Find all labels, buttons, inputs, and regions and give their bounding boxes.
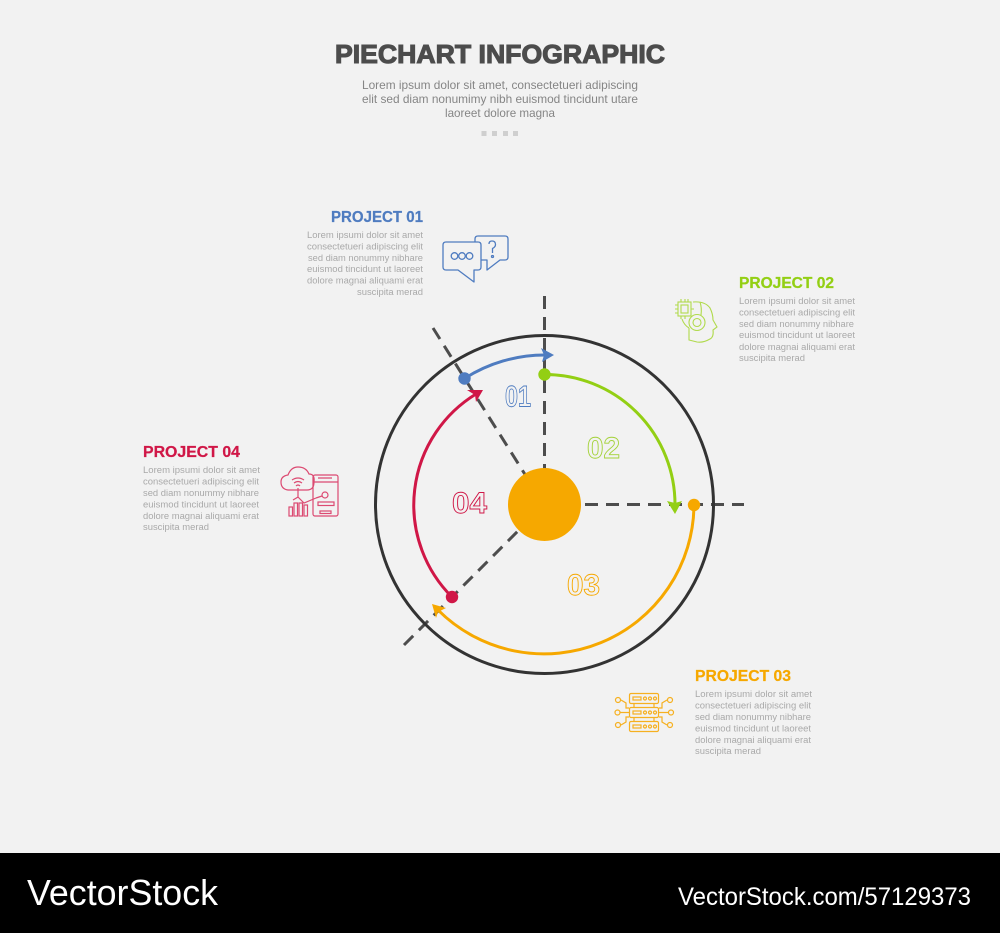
text block project 04 [143, 465, 260, 533]
text block project 03 [695, 689, 812, 757]
footer bar [0, 853, 1000, 933]
dashed divider lines [404, 296, 744, 645]
text block project 03: euismod tincidunt ut laoreet [695, 724, 811, 734]
number 02: 02 [587, 432, 620, 465]
heading project 04: PROJECT 04 [143, 444, 240, 461]
footer url: VectorStock.com/57129373 [678, 883, 971, 911]
text block project 01 [307, 230, 423, 298]
number 01: 01 [505, 380, 531, 414]
text block project 01: Lorem ipsumi dolor sit amet [307, 230, 423, 241]
footer logo: VectorStock [27, 872, 219, 913]
text block project 02: consectetueri adipiscing elit [739, 308, 855, 318]
number 03: 03 [567, 569, 600, 602]
text block project 03: Lorem ipsumi dolor sit amet [695, 689, 812, 700]
text block project 01: sed diam nonummy nibhare [308, 253, 423, 264]
centre circle [508, 468, 581, 541]
subtitle text block [362, 78, 638, 120]
text block project 02: suscipita merad [739, 353, 805, 364]
text block project 03: dolore magnai aliquami erat [695, 735, 811, 746]
text block project 02: dolore magnai aliquami erat [739, 342, 855, 353]
text block project 03: consectetueri adipiscing elit [695, 700, 811, 712]
heading project 03: PROJECT 03 [695, 668, 791, 685]
title: PIECHART INFOGRAPHIC [335, 39, 665, 69]
text block project 02: Lorem ipsumi dolor sit amet [739, 296, 855, 307]
text block project 02 [739, 296, 855, 364]
text block project 04: suscipita merad [143, 522, 209, 533]
panel: project 04 [143, 444, 338, 533]
arc 01 blue arrow [458, 348, 554, 385]
text block project 03: sed diam nonummy nibhare [695, 712, 811, 723]
panel: project 02 [675, 275, 855, 364]
text block project 04: euismod tincidunt ut laoreet [143, 500, 259, 510]
number 04: 04 [452, 487, 487, 520]
text block project 02: euismod tincidunt ut laoreet [739, 330, 855, 341]
title dots [482, 131, 518, 136]
subtitle text block: laoreet dolore magna [445, 106, 555, 120]
panel: project 03 [615, 668, 812, 757]
panel: project 01 [307, 209, 508, 298]
arc 04 red arrow [414, 390, 483, 603]
icon: server network [615, 694, 674, 732]
text block project 01: euismod tincidunt ut laoreet [307, 264, 423, 275]
arc 03 orange arrow [432, 499, 700, 654]
text block project 04: consectetueri adipiscing elit [143, 476, 259, 488]
icon: AI head [675, 299, 717, 342]
text block project 01: consectetueri adipiscing elit [307, 242, 423, 252]
text block project 02: sed diam nonummy nibhare [739, 319, 854, 330]
text block project 04: dolore magnai aliquami erat [143, 511, 259, 522]
text block project 04: Lorem ipsumi dolor sit amet [143, 465, 260, 476]
text block project 04: sed diam nonummy nibhare [143, 488, 259, 499]
subtitle text block: elit sed diam nonumimy nibh euismod tincidunt utare [362, 92, 638, 106]
text block project 01: dolore magnai aliquami erat [307, 276, 423, 286]
pie chart diagram [376, 296, 744, 674]
subtitle text block: Lorem ipsum dolor sit amet, consectetueri adipiscing [362, 78, 638, 92]
heading project 02: PROJECT 02 [739, 275, 834, 292]
outer ring [376, 336, 714, 674]
text block project 01: suscipita merad [357, 287, 423, 298]
icon: cloud and phone [281, 467, 338, 516]
heading project 01: PROJECT 01 [331, 209, 423, 226]
arc 02 green arrow [538, 368, 682, 514]
icon: speech bubbles [443, 236, 508, 282]
text block project 03: suscipita merad [695, 746, 761, 757]
